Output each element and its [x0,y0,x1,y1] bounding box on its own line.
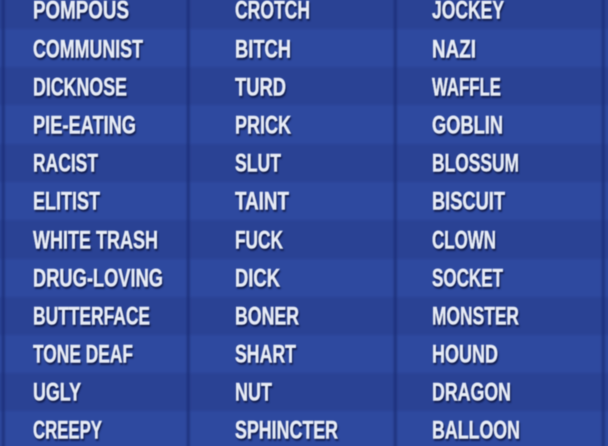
column 1: adjectives: PIE-EATING [33,112,136,140]
column 3: nouns: HOUND [432,340,498,368]
column 2: crude words: BITCH [235,36,291,64]
column 3: nouns: WAFFLE [432,74,501,102]
column 1: adjectives: BUTTERFACE [33,302,150,330]
column 3: nouns [432,0,520,444]
column 2: crude words: FUCK [235,226,283,254]
column 1: adjectives: UGLY [33,378,81,406]
column 2: crude words: SLUT [235,150,281,178]
column 3: nouns: MONSTER [432,302,519,330]
column 3: nouns: SOCKET [432,264,503,292]
column 1: adjectives [33,0,163,444]
column 3: nouns: DRAGON [432,378,511,406]
column 2: crude words: NUT [235,378,272,406]
column 1: adjectives: COMMUNIST [33,36,143,64]
column 3: nouns: BLOSSUM [432,150,519,178]
column 3: nouns: GOBLIN [432,112,503,140]
column 2: crude words: SPHINCTER [235,416,338,444]
column 1: adjectives: DICKNOSE [33,74,127,102]
column 1: adjectives: ELITIST [33,188,100,216]
column 2: crude words [235,0,338,444]
column 1: adjectives: CREEPY [33,416,102,444]
column 2: crude words: DICK [235,264,280,292]
column 3: nouns: BALLOON [432,416,520,444]
column 3: nouns: BISCUIT [432,188,505,216]
column 2: crude words: BONER [235,302,299,330]
column 2: crude words: SHART [235,340,296,368]
column 2: crude words: PRICK [235,112,291,140]
column 3: nouns: CLOWN [432,226,496,254]
column 2: crude words: TURD [235,74,286,102]
column 1: adjectives: DRUG-LOVING [33,264,163,292]
column 1: adjectives: WHITE TRASH [33,226,158,254]
column 2: crude words: TAINT [235,188,289,216]
column 3: nouns: NAZI [432,36,476,64]
column 1: adjectives: TONE DEAF [33,340,133,368]
column 1: adjectives: RACIST [33,150,98,178]
